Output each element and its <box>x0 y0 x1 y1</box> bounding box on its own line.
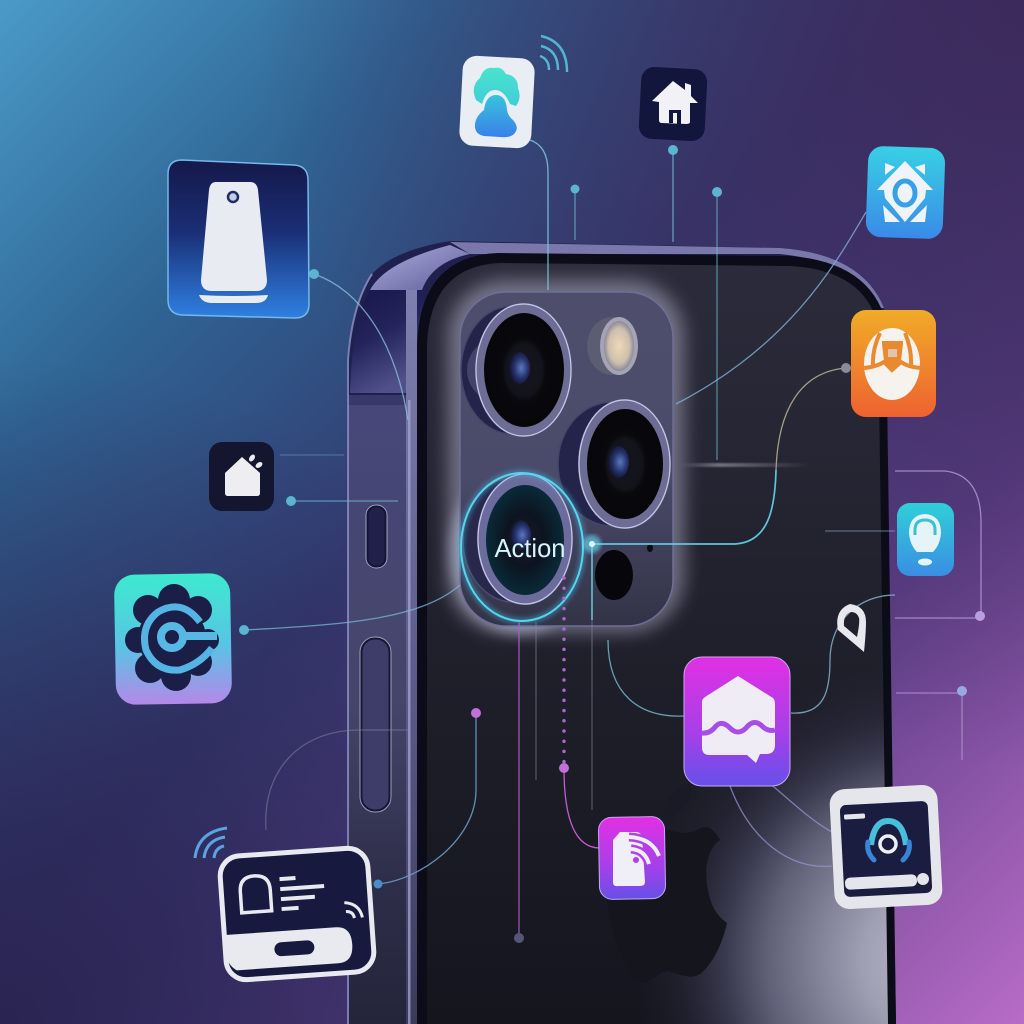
lidar sensor <box>595 550 633 600</box>
icon: house top <box>638 66 708 142</box>
vertical rail <box>406 290 417 1024</box>
back glass <box>427 263 888 1024</box>
corner lavender wedge <box>370 245 470 290</box>
icon: wifi waves top <box>540 36 567 72</box>
icon: orange app <box>851 310 936 417</box>
top lens <box>461 303 572 437</box>
connector nodes <box>239 145 985 943</box>
action highlight ring <box>461 473 583 621</box>
icon: blue diamond app <box>865 146 946 239</box>
connector lines <box>244 140 981 938</box>
black bezel <box>417 253 896 1024</box>
top frame band <box>450 242 884 308</box>
icon: wifi waves bottom left <box>195 828 227 858</box>
back glass light <box>427 263 888 1024</box>
bottom lens <box>463 473 573 605</box>
icon: green gear app <box>114 573 232 705</box>
icon: smart speaker <box>168 160 309 318</box>
small side button <box>366 505 387 568</box>
frame seam <box>348 395 418 405</box>
icon: cloud app <box>459 55 535 149</box>
camera glow <box>448 280 684 632</box>
camera module <box>448 280 684 634</box>
action label: Action <box>494 533 566 563</box>
right lens <box>558 399 671 529</box>
phone body <box>347 241 896 1024</box>
camera plate <box>460 292 673 626</box>
left edge highlight <box>348 274 372 1024</box>
corner dark band <box>350 290 424 393</box>
icon: purple message app <box>684 657 790 786</box>
phone silhouette <box>347 241 896 1024</box>
icon: small house left <box>209 442 274 511</box>
microphone dot <box>647 544 653 552</box>
icon: light bulb app <box>897 503 954 576</box>
action glow dot <box>583 535 601 553</box>
icon: device card bottom left <box>219 847 375 981</box>
action halo <box>450 466 594 634</box>
icon: location pin <box>837 604 866 652</box>
icon: display card right <box>829 784 943 910</box>
large side button <box>360 637 391 812</box>
flash <box>587 317 638 375</box>
apple logo silhouette <box>606 783 727 983</box>
side panel <box>348 404 408 1024</box>
icon: wireless card app <box>598 816 666 900</box>
